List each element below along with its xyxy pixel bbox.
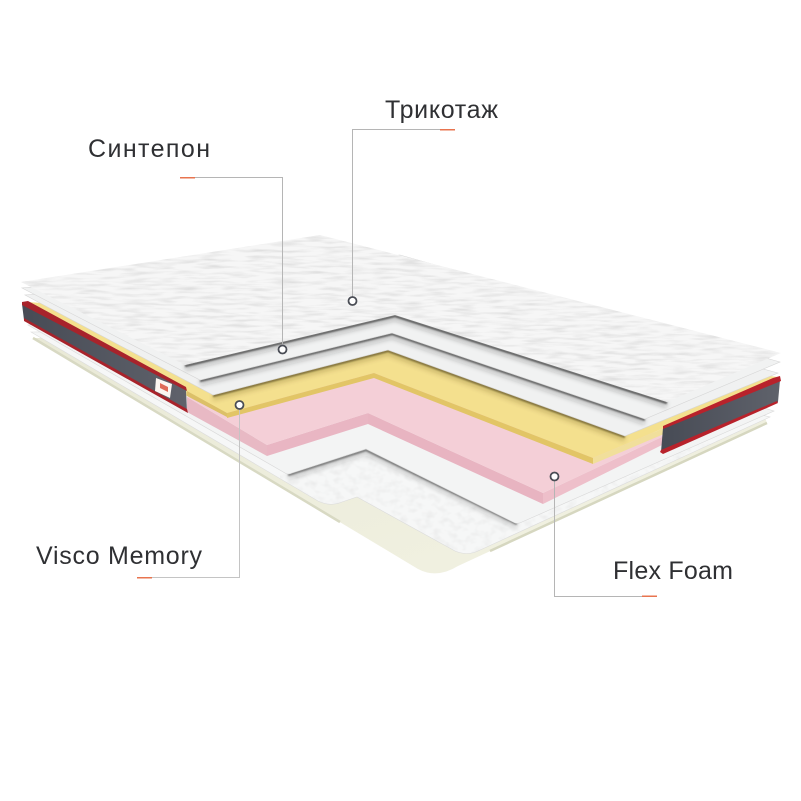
infographic: mattress layers	[21, 100, 781, 597]
layer: cream base	[33, 338, 767, 573]
marker	[278, 346, 286, 354]
label: Visco Memory: Visco Memory	[36, 542, 202, 570]
layer: lower white quilted sheet	[31, 330, 780, 570]
marker	[348, 297, 356, 305]
layer: lower white sheet under foam	[28, 300, 774, 523]
accent tick	[642, 596, 657, 597]
label: Flex Foam: Flex Foam	[613, 557, 733, 585]
shadow: quilt edge	[185, 316, 667, 405]
leader: Flex Foam	[550, 472, 657, 597]
label: Трикотаж: Трикотаж	[385, 96, 498, 124]
marker	[236, 401, 244, 409]
side band: left grey	[22, 301, 188, 413]
quilt texture	[15, 230, 785, 410]
label: Синтепон: Синтепон	[88, 135, 210, 163]
marker	[550, 472, 558, 480]
layer: Flex Foam pink	[187, 345, 664, 504]
accent tick	[440, 129, 455, 130]
layer: synthetic sheet lower	[25, 270, 778, 436]
leader: Visco Memory	[137, 401, 244, 578]
layer: Visco Memory yellow	[28, 302, 778, 464]
layer: Синтепон sheet	[22, 255, 780, 419]
accent tick	[137, 577, 152, 578]
accent tick	[180, 177, 195, 178]
leader: Трикотаж	[348, 129, 455, 305]
layer: Трикотаж quilted top	[15, 230, 785, 410]
shadow: upper sheet edge	[200, 334, 645, 422]
shadow: sheet edge on yellow foam	[213, 351, 625, 439]
side band: right grey	[660, 376, 781, 454]
leader: Синтепон	[180, 177, 286, 354]
shadow: sheet edge on lower sheet	[288, 450, 517, 526]
brand tag	[155, 378, 172, 398]
